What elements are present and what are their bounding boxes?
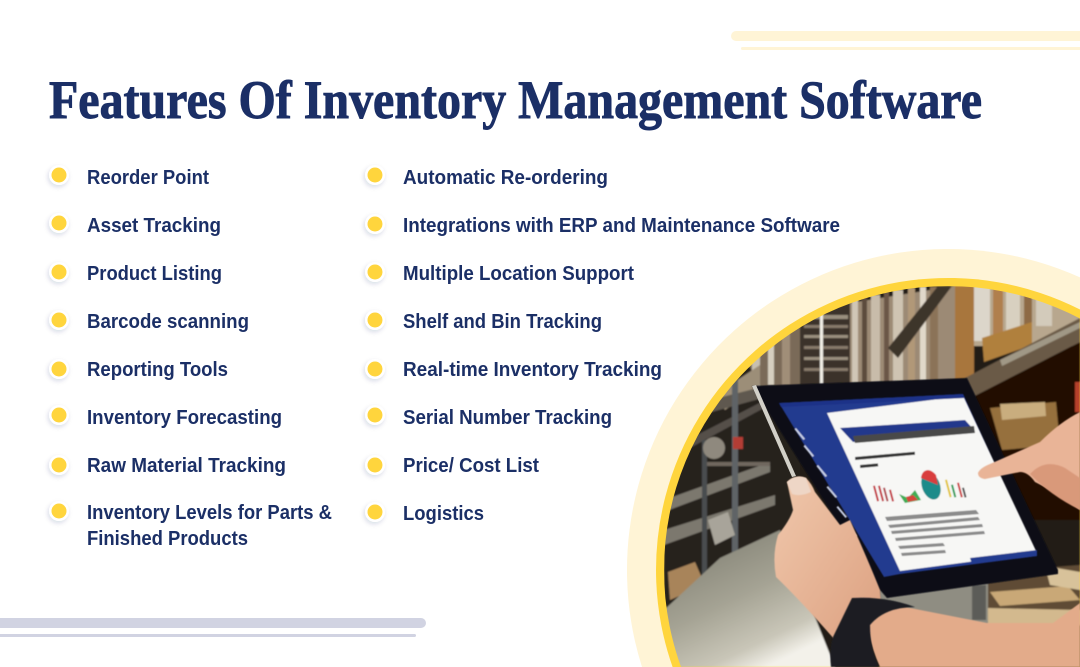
bullet: Reorder Point bbox=[49, 165, 69, 185]
bullet: Multiple Location Support bbox=[365, 262, 385, 282]
warehouse background bbox=[664, 286, 1080, 667]
item: Raw Material Tracking: Raw Material Tracking bbox=[87, 455, 286, 477]
wristwatch bbox=[830, 598, 915, 667]
title: Features Of Inventory Management Software bbox=[49, 70, 982, 130]
dark right bay bbox=[967, 342, 1080, 520]
item: Inventory Levels for Parts and Finished Products: Finished Products bbox=[87, 528, 248, 550]
item: Integrations: Integrations with ERP and Maintenance Software bbox=[403, 215, 840, 237]
aisle floor bbox=[664, 530, 835, 667]
thumbnail bbox=[787, 477, 811, 495]
cream outer ring bbox=[627, 249, 1080, 667]
item: Price/ Cost List: Price/ Cost List bbox=[403, 455, 539, 477]
item: Automatic Re-ordering: Automatic Re-ordering bbox=[403, 167, 608, 189]
tablet screen bbox=[779, 394, 1037, 577]
forearm bbox=[868, 603, 1080, 667]
bullet: Integrations bbox=[365, 214, 385, 234]
item: Reorder Point: Reorder Point bbox=[87, 167, 209, 189]
bullet: Raw Material Tracking bbox=[49, 455, 69, 475]
item: Serial Number Tracking: Serial Number Tracking bbox=[403, 407, 612, 429]
right hand pointing bbox=[978, 412, 1080, 510]
left hand holding tablet bbox=[774, 477, 882, 640]
list column 2 bbox=[365, 165, 840, 525]
item: Logistics: Logistics bbox=[403, 503, 484, 525]
top decorative bars bbox=[731, 31, 1080, 50]
tablet charts bbox=[873, 470, 967, 503]
bullet: Inventory Forecasting bbox=[49, 405, 69, 425]
list column 1 bbox=[49, 165, 332, 550]
bullet: Reporting Tools bbox=[49, 359, 69, 379]
bullet: Real-time Inventory Tracking bbox=[365, 359, 385, 379]
bottom decorative bars bbox=[0, 618, 426, 637]
bullet: Product Listing bbox=[49, 262, 69, 282]
bullet: Logistics bbox=[365, 502, 385, 522]
tablet table bbox=[885, 510, 985, 556]
left shelving bbox=[711, 538, 712, 539]
item: Reporting Tools: Reporting Tools bbox=[87, 359, 228, 381]
item: Multiple Location Support: Multiple Location Support bbox=[403, 263, 634, 285]
yellow ring bbox=[656, 278, 1080, 667]
item: Shelf and Bin Tracking: Shelf and Bin Tracking bbox=[403, 311, 602, 333]
item: Inventory Levels for Parts and Finished Products: Inventory Levels for Parts & bbox=[87, 502, 332, 524]
item: Barcode scanning: Barcode scanning bbox=[87, 311, 249, 333]
bullet: Serial Number Tracking bbox=[365, 405, 385, 425]
bullet: Automatic Re-ordering bbox=[365, 165, 385, 185]
item: Asset Tracking: Asset Tracking bbox=[87, 215, 221, 237]
item: Inventory Levels for Parts and Finished Products bbox=[87, 502, 332, 550]
bullet: Shelf and Bin Tracking bbox=[365, 310, 385, 330]
bullet: Barcode scanning bbox=[49, 310, 69, 330]
tablet body bbox=[752, 378, 1058, 598]
bullet: Inventory Levels bbox=[49, 501, 69, 521]
item: Inventory Forecasting: Inventory Forecasting bbox=[87, 407, 282, 429]
photo: hands holding tablet in warehouse bbox=[664, 286, 1080, 667]
upper aisle shelving bbox=[800, 300, 850, 385]
bullet: Asset Tracking bbox=[49, 213, 69, 233]
bullet: Price/ Cost List bbox=[365, 455, 385, 475]
item: Real-time Inventory Tracking: Real-time Inventory Tracking bbox=[403, 359, 662, 381]
pallets right bbox=[880, 583, 989, 624]
item: Product Listing: Product Listing bbox=[87, 263, 222, 285]
